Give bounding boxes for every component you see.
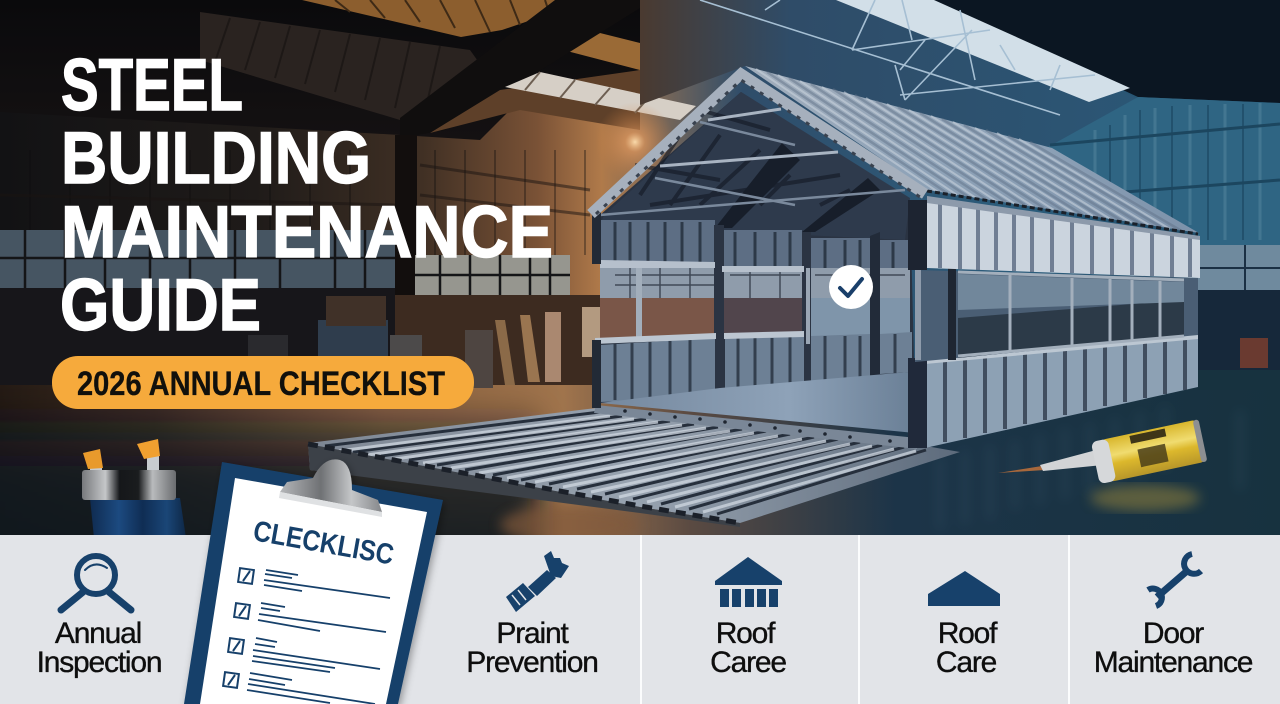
left ceiling [0,0,660,140]
badge: 2026 annual checklist [52,356,474,409]
icon: wrench [1148,554,1201,606]
title: MAINTENANCE [61,192,553,273]
lower back wall [600,332,912,402]
label: annual inspection: Annual [55,617,141,650]
panel: bottom category strip: Inspection [37,646,161,679]
panel: bottom category strip: Maintenance [1094,646,1253,679]
left wall panels [309,150,586,255]
floor [600,372,915,433]
right upper striped wall [927,197,1200,278]
title: STEEL [61,45,243,126]
icon: caulk tube [998,419,1207,511]
label: roof caree: Roof [716,617,776,650]
item: annual inspection [55,556,141,650]
icon: magnifying glass [61,556,131,610]
checklist rows [223,568,390,704]
right ceiling [640,0,1051,146]
floor reflections right [940,406,1240,530]
clipboard [184,459,443,704]
panel: bottom category strip [0,535,1280,704]
left front posts [592,210,601,264]
steel building [591,66,1200,449]
item: roof caree [715,557,782,650]
right lower wall [925,336,1198,448]
upper back panels [600,220,910,268]
clipboard heading: CLECKLISC [251,515,396,572]
underside of roof [600,92,910,240]
workshop [0,288,600,388]
check badge [829,265,873,309]
icon: roof with columns [715,557,782,607]
badge: 2026 annual checklist: 2026 ANNUAL CHECKLIST [77,365,445,403]
label: paint prevention: Praint [496,617,569,650]
label: roof care: Roof [938,617,998,650]
panel: bottom category strip: Caree [710,646,786,679]
item: paint prevention [496,551,569,650]
columns [714,225,724,400]
title: GUIDE [60,265,261,346]
label: door maintenance: Door [1143,617,1204,650]
icon: roof [928,571,1000,606]
item: door maintenance [1143,554,1204,650]
clip [279,459,382,517]
gable truss [591,74,925,214]
panel: bottom category strip: Care [936,646,997,679]
icon: paint brushes / tubes [82,439,186,538]
corrugated roof panel on floor [308,408,960,527]
title: BUILDING [61,118,371,199]
icon: paintbrush [506,551,569,612]
right wall [1048,97,1280,245]
wall windows [0,230,570,295]
panel: bottom category strip: Prevention [466,646,598,679]
title [60,45,553,346]
back windows [600,268,910,338]
roof [745,66,1199,233]
back interior [600,92,915,403]
item: roof care [928,571,1000,650]
right windows [915,270,1198,362]
